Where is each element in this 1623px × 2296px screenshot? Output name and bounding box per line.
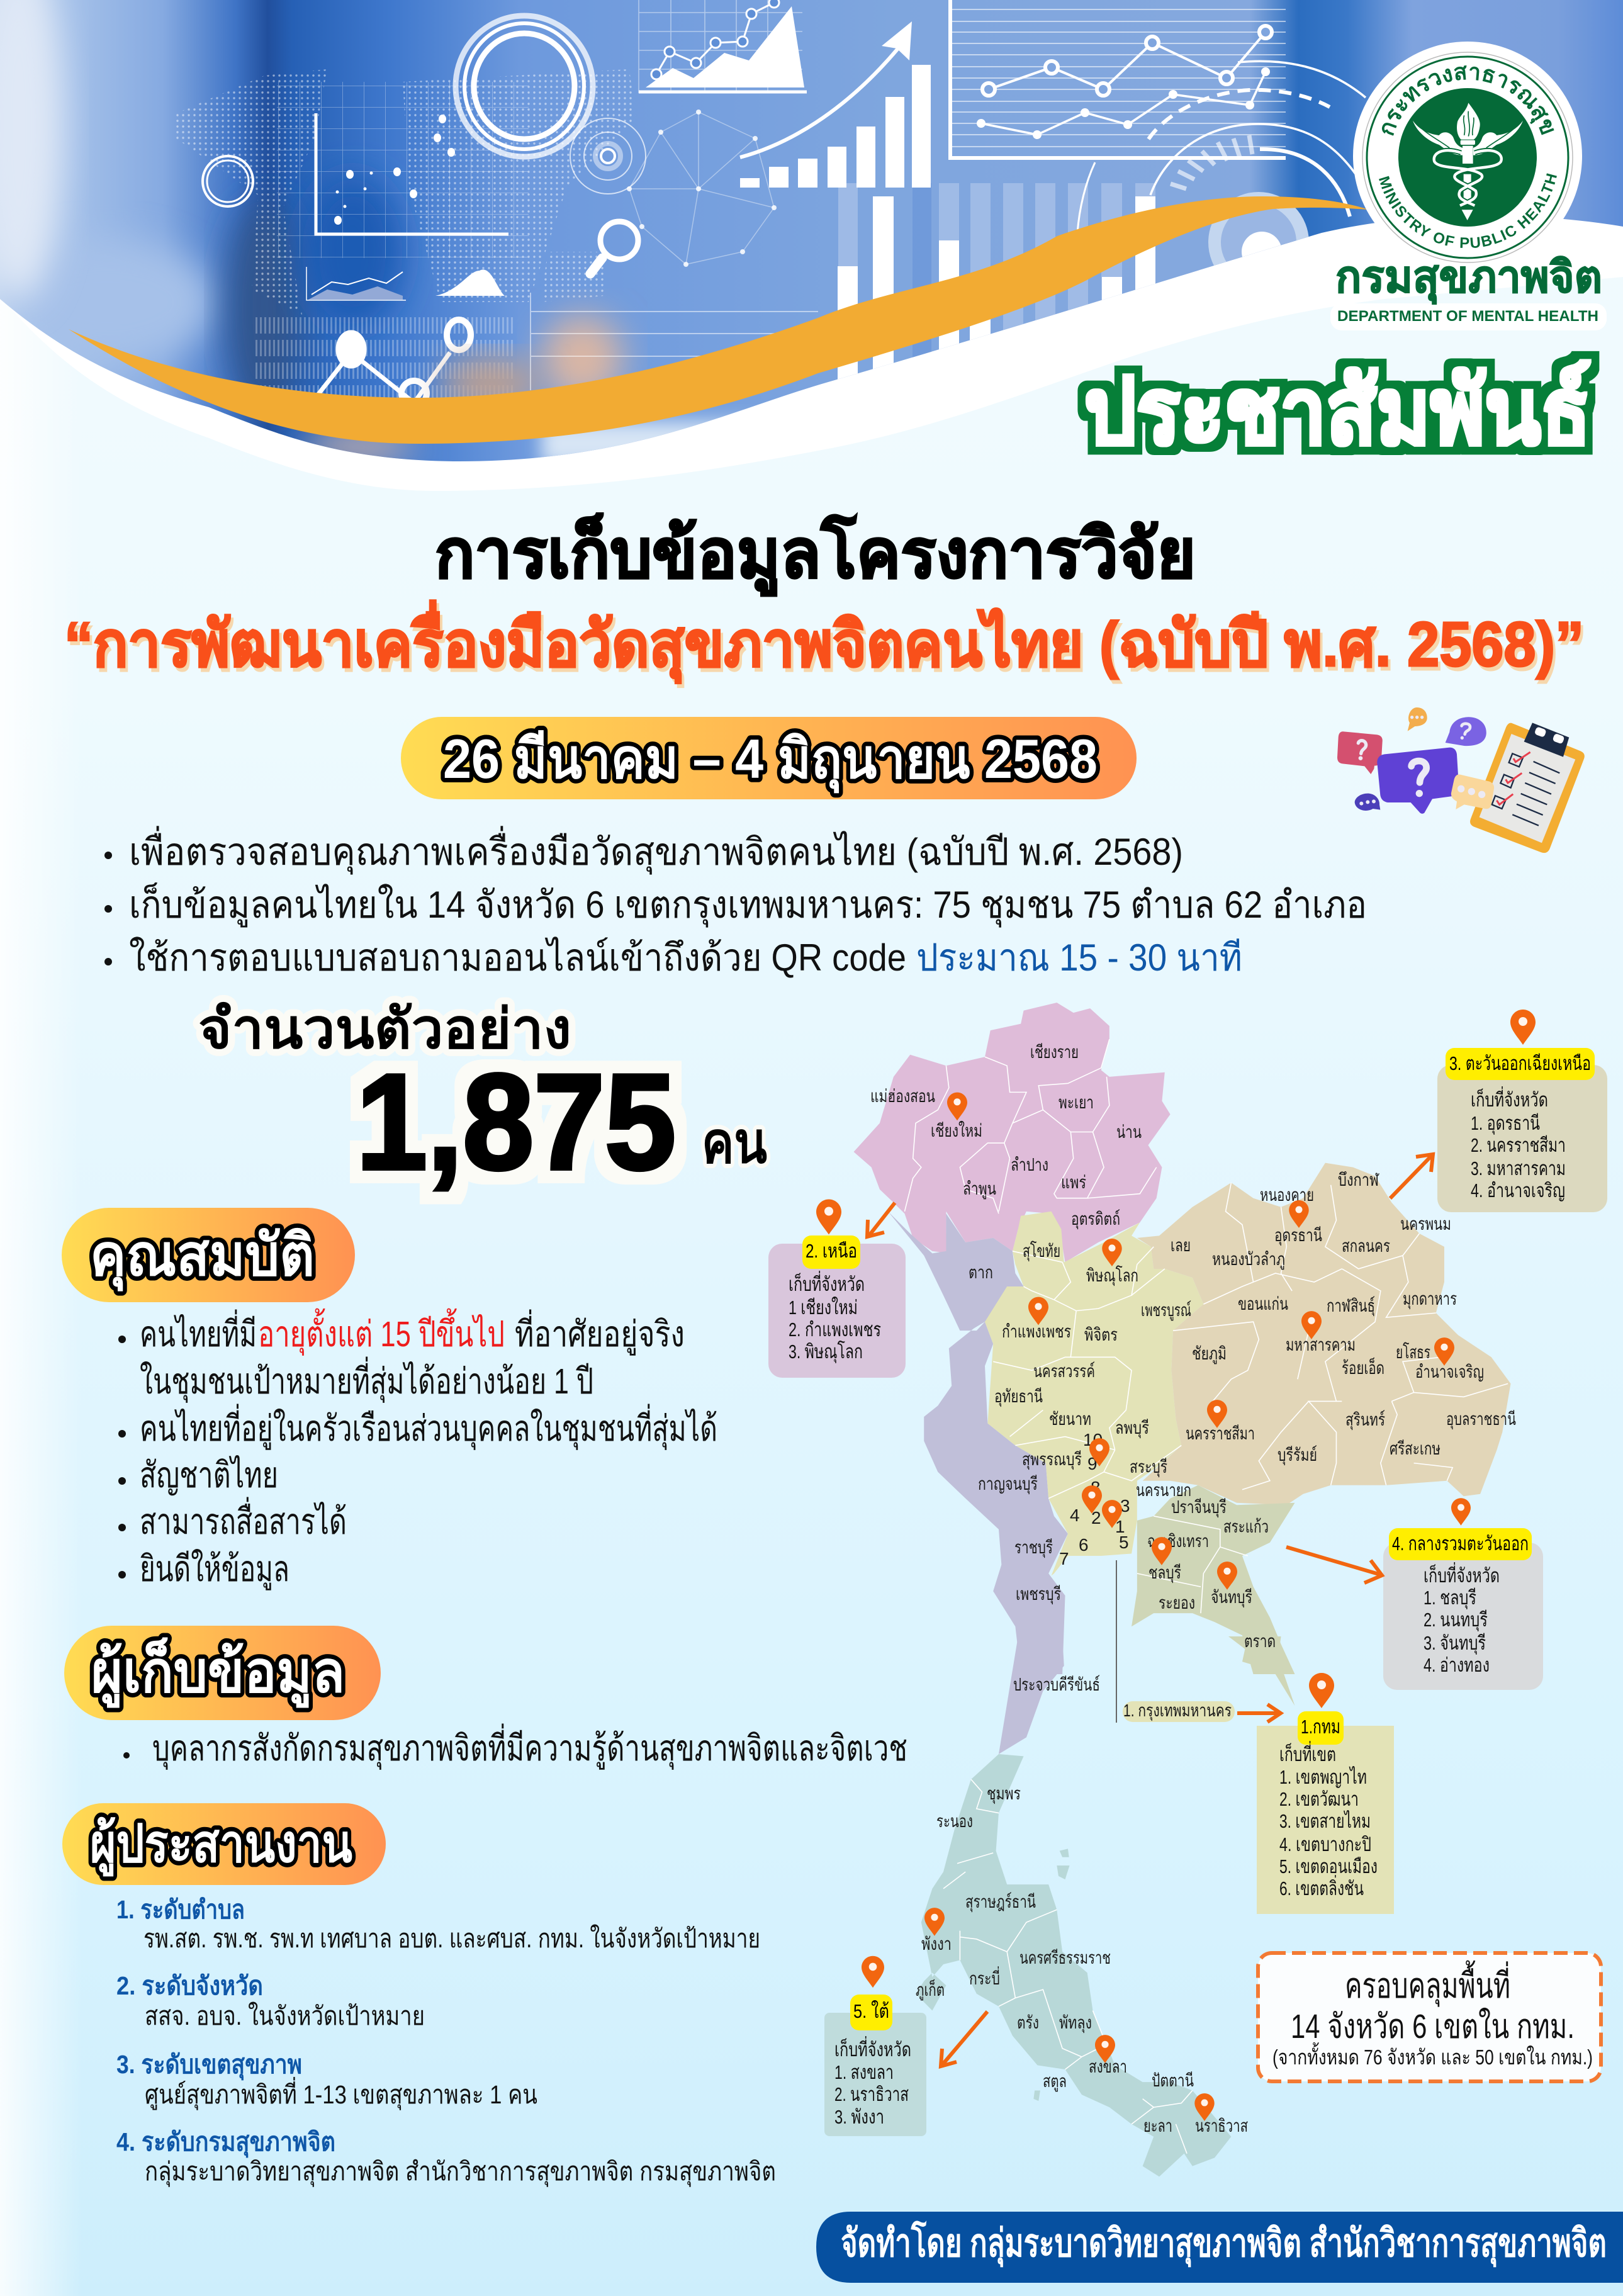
- panel: region 1 Bangkok: [1116, 1560, 1394, 1914]
- province labels: กาญจนบุรี: [978, 1474, 1038, 1495]
- level 2 heading: 2. ระดับจังหวัด: [116, 1971, 263, 2000]
- province labels: ลำปาง: [1011, 1155, 1048, 1174]
- province labels: 5: [1119, 1533, 1129, 1552]
- icon: network globe: [627, 110, 777, 267]
- panel: region 3 northeast: 3. มหาสารคาม: [1471, 1157, 1566, 1179]
- sample size label: จำนวนตัวอย่าง: [198, 998, 571, 1060]
- label: Bangkok: 1.กทม: [1301, 1716, 1340, 1738]
- map of Thailand: [854, 1003, 1516, 2176]
- region: northeast: [1137, 1163, 1511, 1505]
- province labels: ชัยภูมิ: [1192, 1344, 1227, 1365]
- English department name: DEPARTMENT OF MENTAL HEALTH: [1337, 308, 1598, 325]
- arrow: to northeast panel: [1390, 1154, 1433, 1198]
- panel: region 2 north: เก็บที่จังหวัด: [789, 1271, 865, 1295]
- level 1 text: รพ.สต. รพ.ช. รพ.ท เทศบาล อบต. และศบส. กทม. ในจังหวัดเป้าหมาย: [143, 1924, 760, 1953]
- province labels: นครนายก: [1136, 1480, 1191, 1500]
- province labels: บึงกาฬ: [1338, 1170, 1379, 1190]
- icon: pin: [1510, 1010, 1536, 1045]
- chart: mountain chart: [639, 0, 807, 93]
- province labels: มหาสารคาม: [1286, 1335, 1356, 1354]
- province labels: ชุมพร: [987, 1784, 1021, 1804]
- panel: region 4 central east: [1383, 1498, 1543, 1690]
- chart: barcode strips: [255, 315, 513, 409]
- panel: region 2 north: 1 เชียงใหม่: [789, 1297, 858, 1319]
- province labels: [870, 1042, 1516, 2136]
- province labels: 1: [1115, 1517, 1125, 1536]
- label: Bangkok: [1298, 1711, 1344, 1745]
- province labels: ตราด: [1244, 1631, 1276, 1651]
- label: north: [802, 1235, 860, 1269]
- province labels: เลย: [1171, 1235, 1191, 1255]
- seal bottom text: MINISTRY OF PUBLIC HEALTH: [1379, 173, 1557, 248]
- province labels: อุตรดิตถ์: [1071, 1209, 1120, 1230]
- province labels: พิษณุโลก: [1086, 1265, 1138, 1286]
- bullet list: project details: [104, 826, 1367, 979]
- province labels: ลพบุรี: [1115, 1418, 1149, 1439]
- province labels: บุรีรัมย์: [1278, 1445, 1317, 1466]
- province labels: กระบี่: [969, 1966, 1000, 1988]
- province labels: สกลนคร: [1342, 1236, 1390, 1256]
- title: การเก็บข้อมูลโครงการวิจัย: [435, 513, 1196, 596]
- arrow: to Bangkok panel: [1237, 1704, 1281, 1722]
- Thai department name: กรมสุขภาพจิต: [1335, 252, 1602, 305]
- panel: region 5 south: 1. สงขลา: [834, 2061, 894, 2083]
- icon: map location pins: [924, 1093, 1454, 2121]
- panel: region 4 central east: 2. นนทบุรี: [1424, 1609, 1488, 1632]
- province labels: ศรีสะเกษ: [1390, 1439, 1440, 1458]
- panel: region 2 north: 2. กำแพงเพชร: [789, 1319, 881, 1341]
- chart: white peak: [435, 269, 505, 296]
- panel: qualifications: [62, 1208, 717, 1590]
- callout heading: ครอบคลุมพื้นที่: [1345, 1961, 1510, 2007]
- qualification 5: ยินดีให้ข้อมูล: [140, 1548, 289, 1590]
- bullet 3: ใช้การตอบแบบสอบถามออนไลน์เข้าถึงด้วย QR code: [129, 936, 906, 979]
- panel: region 2 north: 3. พิษณุโลก: [789, 1341, 863, 1364]
- bullet 3 duration: ประมาณ 15 - 30 นาที: [916, 937, 1242, 979]
- province labels: ราชบุรี: [1014, 1538, 1053, 1558]
- gauge: dial behind swoosh: [1215, 198, 1303, 286]
- province labels: อำนาจเจริญ: [1415, 1362, 1484, 1382]
- label: Bangkok pill: 1. กรุงเทพมหานคร: [1123, 1701, 1232, 1721]
- chart: rising bars: [740, 65, 931, 188]
- panel: region 1 Bangkok: 3. เขตสายไหม: [1279, 1810, 1371, 1832]
- level 2 text: สสจ. อบจ. ในจังหวัดเป้าหมาย: [145, 2001, 425, 2030]
- province labels: จันทบุรี: [1211, 1587, 1252, 1608]
- province labels: 10: [1083, 1430, 1103, 1449]
- province labels: 4: [1070, 1505, 1080, 1525]
- province labels: ปราจีนบุรี: [1171, 1497, 1227, 1518]
- panel: region 5 south: 3. พังงา: [834, 2106, 884, 2128]
- province labels: 2: [1091, 1508, 1101, 1528]
- panel: data collectors: [64, 1626, 907, 1770]
- icon: pin: [1451, 1498, 1471, 1526]
- province labels: ตาก: [969, 1263, 993, 1282]
- province labels: พะเยา: [1059, 1093, 1094, 1112]
- province labels: พังงา: [921, 1934, 952, 1954]
- icon: small ring: [203, 156, 253, 206]
- icon: pin: [862, 1956, 884, 1988]
- province labels: ยะลา: [1143, 2116, 1172, 2136]
- province labels: ภูเก็ต: [916, 1979, 945, 2001]
- panel: region 4 central east: 3. จันทบุรี: [1424, 1632, 1486, 1655]
- province labels: สุพรรณบุรี: [1022, 1449, 1082, 1470]
- panel: region 5 south: 2. นราธิวาส: [834, 2083, 909, 2105]
- province labels: ฉะเชิงเทรา: [1147, 1531, 1209, 1551]
- chart: line chart with grid: [950, 0, 1366, 233]
- callout: coverage area: [1258, 1953, 1601, 2081]
- date text: 26 มีนาคม – 4 มิถุนายน 2568: [443, 728, 1098, 794]
- province labels: ระยอง: [1159, 1593, 1195, 1612]
- province labels: ขอนแก่น: [1238, 1294, 1288, 1314]
- chart: network nodes: [312, 320, 471, 406]
- province labels: น่าน: [1116, 1122, 1142, 1142]
- logo: Ministry of Public Health seal: [1353, 42, 1582, 263]
- white wave band under header: [0, 0, 1623, 491]
- panel: region 3 northeast: 4. อำนาจเจริญ: [1471, 1179, 1565, 1201]
- panel: region 3 northeast: 2. นครราชสีมา: [1471, 1134, 1566, 1156]
- label: north: 2. เหนือ: [806, 1240, 857, 1262]
- region: south: [916, 1754, 1231, 2176]
- icon: pin: [816, 1200, 841, 1235]
- province labels: สงขลา: [1089, 2057, 1127, 2076]
- seal top text: กระทรวงสาธารณสุข: [1382, 65, 1554, 136]
- icon: questionnaire clipboard and speech bubbles: [1337, 707, 1585, 853]
- province labels: สระแก้ว: [1223, 1517, 1269, 1536]
- province labels: อุบลราชธานี: [1446, 1409, 1516, 1430]
- icon: target dial: [570, 118, 646, 194]
- panel: region 4 central east: 1. ชลบุรี: [1424, 1587, 1476, 1610]
- sample size number: 1,875: [356, 1045, 676, 1198]
- province labels: นครสวรรค์: [1033, 1361, 1095, 1381]
- level 3 heading: 3. ระดับเขตสุขภาพ: [116, 2050, 302, 2081]
- arrow: rising trend: [740, 21, 912, 157]
- fingertip: [302, 315, 806, 466]
- bullet 1: เพื่อตรวจสอบคุณภาพเครื่องมือวัดสุขภาพจิตคนไทย (ฉบับปี พ.ศ. 2568): [129, 826, 1183, 875]
- region: west: [888, 1212, 1068, 1674]
- region: north: [854, 1003, 1171, 1262]
- qualification 1 end: ที่อาศัยอยู่จริง: [515, 1309, 685, 1356]
- icon: magnifier: [590, 222, 638, 274]
- panel: region 4 central east: เก็บที่จังหวัด: [1424, 1562, 1500, 1587]
- province labels: นครพนม: [1400, 1214, 1451, 1234]
- footer banner: [816, 2212, 1623, 2283]
- province labels: พิจิตร: [1084, 1325, 1118, 1344]
- province labels: หนองคาย: [1260, 1185, 1314, 1205]
- arrow: to north panel: [867, 1203, 895, 1237]
- arrow: to central east panel: [1286, 1547, 1382, 1583]
- province labels: แพร่: [1061, 1173, 1086, 1192]
- region: central: [985, 1212, 1203, 1576]
- province labels: ระนอง: [936, 1811, 973, 1831]
- province labels: 7: [1059, 1549, 1069, 1568]
- region: east: [1132, 1485, 1295, 1674]
- level 4 heading: 4. ระดับกรมสุขภาพจิต: [116, 2127, 335, 2158]
- region: prachuap and trat tail, south: [916, 1636, 1295, 2176]
- chart: mini line area: [306, 267, 406, 300]
- qualification 4: สามารถสื่อสารได้: [140, 1497, 347, 1542]
- panel: region 1 Bangkok: 1. เขตพญาไท: [1279, 1766, 1367, 1788]
- arrow: to south panel: [941, 2012, 987, 2066]
- province labels: เพชรบุรี: [1016, 1584, 1061, 1605]
- panel: region 3 northeast: [1437, 1010, 1607, 1212]
- heading: qualifications: คุณสมบัติ: [90, 1224, 315, 1292]
- label: central east: [1389, 1528, 1532, 1560]
- sample size unit: คน: [702, 1111, 767, 1175]
- map regions: north, west, central, northeast, east: [854, 1003, 1511, 1674]
- panel: region 1 Bangkok: 5. เขตดอนเมือง: [1279, 1855, 1378, 1877]
- panel: region 2 north: [768, 1200, 906, 1378]
- icon: caduceus: [1413, 103, 1523, 220]
- level 3 text: ศูนย์สุขภาพจิตที่ 1-13 เขตสุขภาพละ 1 คน: [145, 2077, 537, 2110]
- province labels: อุดรธานี: [1274, 1225, 1322, 1246]
- chart: data grid with scatter points: [277, 82, 529, 258]
- province labels: ชัยนาท: [1049, 1409, 1091, 1429]
- province labels: เชียงราย: [1030, 1042, 1079, 1062]
- panel: region 3 northeast: เก็บที่จังหวัด: [1471, 1086, 1548, 1111]
- chart: pale background strips and white bars: [838, 183, 1155, 455]
- province labels: 8: [1091, 1478, 1101, 1497]
- panel: region 1 Bangkok: 2. เขตวัฒนา: [1279, 1788, 1359, 1810]
- panel: region 5 south: [824, 1956, 926, 2136]
- panel: region 5 south: เก็บที่จังหวัด: [834, 2036, 911, 2061]
- province labels: กำแพงเพชร: [1002, 1322, 1071, 1341]
- province labels: 3: [1120, 1496, 1130, 1516]
- level 4 text: กลุ่มระบาดวิทยาสุขภาพจิต สำนักวิชาการสุขภาพจิต กรมสุขภาพจิต: [145, 2157, 776, 2187]
- province labels: นราธิวาส: [1195, 2116, 1248, 2136]
- province labels: ร้อยเอ็ด: [1342, 1357, 1384, 1378]
- panel: region 4 central east: 4. อ่างทอง: [1424, 1654, 1490, 1676]
- label: south: [850, 1995, 892, 2030]
- province labels: มุกดาหาร: [1403, 1289, 1457, 1310]
- province labels: นครศรีธรรมราช: [1019, 1948, 1111, 1967]
- qualification 1 second line: ในชุมชนเป้าหมายที่สุ่มได้อย่างน้อย 1 ปี: [140, 1356, 593, 1404]
- header photo: data analytics: [0, 0, 1623, 504]
- panel: coordinators: [62, 1803, 776, 2187]
- logo wordmark: department name: [1330, 252, 1607, 330]
- icon: dotted world map: [176, 69, 636, 315]
- province labels: แม่ฮ่องสอน: [870, 1086, 935, 1106]
- label: northeast: [1446, 1048, 1595, 1080]
- icon: pin: [1309, 1673, 1334, 1708]
- province labels: สุรินทร์: [1345, 1410, 1385, 1431]
- icon: concentric rings: [456, 16, 593, 157]
- sample size: [198, 998, 767, 1198]
- label: south: 5. ใต้: [853, 2000, 889, 2022]
- province labels: สุราษฎร์ธานี: [965, 1892, 1036, 1913]
- heading: coordinators: ผู้ประสานงาน: [90, 1814, 352, 1877]
- province labels: อุทัยธานี: [994, 1387, 1043, 1407]
- province labels: ยโสธร: [1396, 1342, 1430, 1362]
- bullet 2: เก็บข้อมูลคนไทยใน 14 จังหวัด 6 เขตกรุงเทพมหานคร: 75 ชุมชน 75 ตำบล 62 อำเภอ: [129, 882, 1367, 928]
- panel: region 1 Bangkok: เก็บที่เขต: [1279, 1741, 1336, 1765]
- date pill: [401, 717, 1137, 799]
- province labels: กาฬสินธุ์: [1327, 1296, 1375, 1317]
- heading: data collectors: ผู้เก็บข้อมูล: [91, 1637, 345, 1708]
- province labels: สตูล: [1043, 2071, 1067, 2092]
- qualification 3: สัญชาติไทย: [140, 1455, 278, 1495]
- panel: region 3 northeast: 1. อุดรธานี: [1471, 1112, 1540, 1135]
- province labels: 9: [1087, 1454, 1098, 1473]
- province labels: 6: [1079, 1535, 1089, 1555]
- province labels: สุโขทัย: [1023, 1241, 1060, 1262]
- label: central east: 4. กลางรวมตะวันออก: [1392, 1533, 1529, 1555]
- province labels: ปัตตานี: [1152, 2071, 1194, 2090]
- province labels: เชียงใหม่: [931, 1120, 982, 1140]
- orange swoosh: [69, 196, 1369, 444]
- qualification 2: คนไทยที่อยู่ในครัวเรือนส่วนบุคคลในชุมชนที่สุ่มได้: [140, 1404, 717, 1451]
- province labels: พัทลุง: [1059, 2013, 1092, 2034]
- province labels: ชลบุรี: [1148, 1563, 1181, 1584]
- province labels: ประจวบคีรีขันธ์: [1013, 1675, 1100, 1694]
- qualification 1: คนไทยที่มี: [140, 1309, 257, 1354]
- chart: line chart lower grid: [531, 293, 818, 390]
- level 1 heading: 1. ระดับตำบล: [116, 1895, 245, 1924]
- province labels: ตรัง: [1017, 2013, 1039, 2032]
- province labels: เพชรบูรณ์: [1141, 1300, 1191, 1321]
- qualification age highlight: อายุตั้งแต่ 15 ปีขึ้นไป: [258, 1308, 505, 1356]
- province labels: ลำพูน: [963, 1179, 996, 1200]
- panel: region 1 Bangkok: 4. เขตบางกะปิ: [1279, 1833, 1371, 1855]
- collectors description: บุคลากรสังกัดกรมสุขภาพจิตที่มีความรู้ด้านสุขภาพจิตและจิตเวช: [152, 1723, 907, 1770]
- province labels: นครราชสีมา: [1186, 1424, 1255, 1443]
- panel: region 1 Bangkok: 6. เขตตลิ่งชัน: [1279, 1875, 1364, 1899]
- province labels: หนองบัวลำภู: [1212, 1249, 1285, 1270]
- province labels: สระบุรี: [1130, 1457, 1167, 1478]
